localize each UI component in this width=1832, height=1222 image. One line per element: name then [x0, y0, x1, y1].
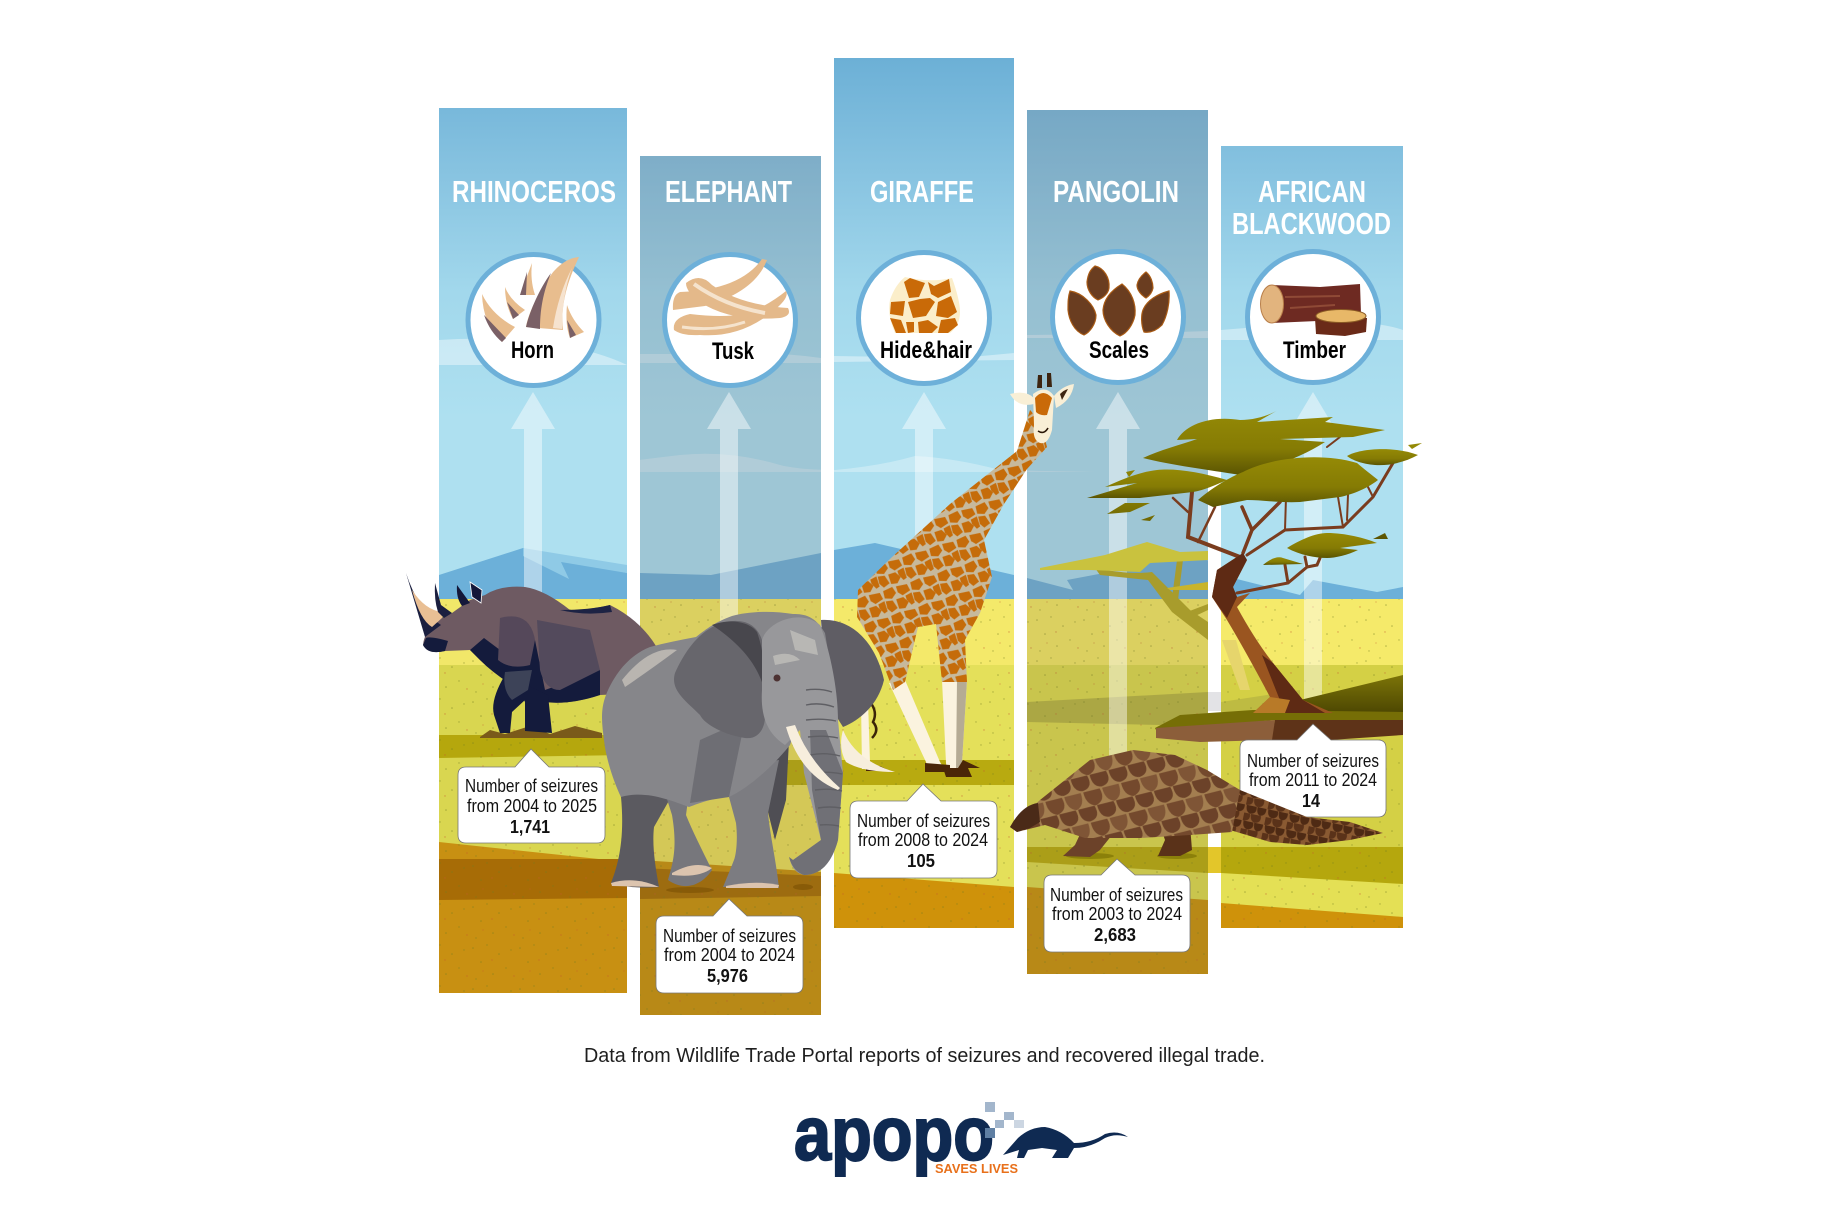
elephant near rear leg — [652, 770, 712, 886]
icon: tusk circle — [664, 254, 796, 386]
shadow band crossing the gap — [1208, 692, 1221, 711]
elephant ear — [674, 621, 766, 738]
heading: PANGOLIN: PANGOLIN — [1053, 174, 1179, 209]
callout: elephant seizures — [656, 899, 803, 993]
callout: pangolin seizures: from 2003 to 2024 — [1052, 904, 1182, 924]
icon: hide and hair circle — [858, 252, 990, 384]
logo: APOPO: SAVES LIVES — [935, 1161, 1018, 1176]
callout: pangolin seizures: 2,683 — [1094, 925, 1136, 945]
logo pixels — [985, 1102, 1024, 1138]
illustration: elephant — [602, 612, 895, 893]
tree branches — [1173, 437, 1393, 593]
giraffe head — [1010, 373, 1074, 443]
heading: RHINOCEROS: RHINOCEROS — [452, 174, 616, 209]
tree trunk — [1212, 553, 1333, 713]
label: Hide&hair: Hide&hair — [880, 337, 972, 364]
callout: rhinoceros seizures: Number of seizures — [465, 776, 598, 796]
callout: african blackwood seizures: from 2011 to 2024 — [1249, 770, 1377, 790]
callout: african blackwood seizures: Number of seizures — [1247, 751, 1379, 771]
panel: pangolin column — [1027, 110, 1208, 974]
label: Timber: Timber — [1283, 337, 1346, 364]
logo: APOPO — [794, 1092, 1128, 1177]
heading: AFRICAN BLACKWOOD: BLACKWOOD — [1232, 206, 1391, 241]
illustration: pangolin — [1010, 750, 1383, 859]
elephant far front leg — [760, 730, 789, 840]
label: Horn: Horn — [511, 337, 554, 364]
illustration: giraffe — [857, 373, 1074, 777]
illustration: rhinoceros — [406, 573, 656, 738]
infographic canvas — [406, 58, 1422, 1177]
logo rat — [1003, 1127, 1128, 1158]
callout: giraffe seizures: from 2008 to 2024 — [858, 830, 988, 850]
callout: african blackwood seizures: 14 — [1302, 791, 1320, 811]
callout: elephant seizures: Number of seizures — [663, 926, 796, 946]
tree canopy — [1087, 410, 1422, 565]
footnote: Data from Wildlife Trade Portal reports of seizures and recovered illegal trade. — [584, 1045, 1265, 1067]
icon: scales circle — [1052, 252, 1184, 382]
illustration: acacia tree — [1087, 410, 1422, 742]
icon: timber circle — [1248, 252, 1378, 382]
panel: giraffe column — [834, 58, 1014, 928]
callout: pangolin seizures — [1044, 859, 1190, 952]
logo: APOPO: apopo — [794, 1092, 994, 1177]
heading: GIRAFFE: GIRAFFE — [870, 174, 974, 209]
elephant far rear leg — [611, 770, 675, 888]
heading: AFRICAN BLACKWOOD — [1232, 174, 1391, 241]
panel: elephant column — [640, 156, 821, 1015]
callout: african blackwood seizures — [1240, 724, 1386, 817]
elephant tusk — [786, 725, 840, 790]
label: Scales: Scales — [1089, 337, 1149, 364]
callout: rhinoceros seizures: 1,741 — [510, 817, 550, 837]
callout: pangolin seizures: Number of seizures — [1050, 885, 1183, 905]
background acacia tree — [1040, 542, 1250, 690]
callout: rhinoceros seizures: from 2004 to 2025 — [467, 796, 597, 816]
heading: AFRICAN BLACKWOOD: AFRICAN — [1258, 174, 1366, 209]
callout: rhinoceros seizures — [458, 749, 605, 843]
callout: giraffe seizures — [850, 784, 997, 878]
icon: horn circle — [468, 254, 599, 386]
callout: giraffe seizures: 105 — [907, 851, 935, 871]
rhino ears — [457, 582, 482, 606]
rhino horns — [406, 573, 452, 637]
elephant head and trunk — [762, 617, 843, 875]
elephant near front leg — [723, 760, 779, 888]
panel: african blackwood column — [1221, 146, 1403, 929]
heading: ELEPHANT: ELEPHANT — [665, 174, 792, 209]
callout: giraffe seizures: Number of seizures — [857, 811, 990, 831]
callout: elephant seizures: 5,976 — [707, 966, 748, 986]
ground band crossing the gap — [1208, 847, 1221, 873]
panel: rhinoceros column — [439, 108, 627, 1000]
label: Tusk: Tusk — [712, 338, 755, 365]
callout: elephant seizures: from 2004 to 2024 — [664, 945, 795, 965]
